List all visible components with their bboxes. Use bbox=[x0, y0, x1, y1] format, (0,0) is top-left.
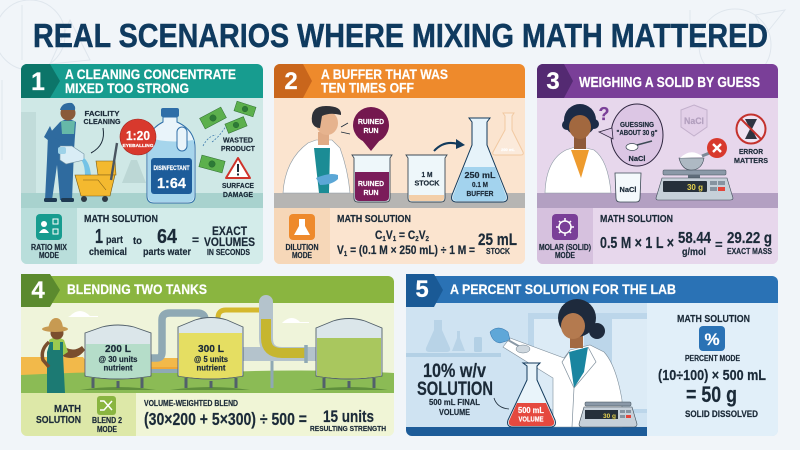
panel 2 number: 2 bbox=[284, 68, 298, 95]
ruined run bubble: RUN bbox=[364, 126, 378, 135]
disinfectant jug bbox=[147, 108, 195, 203]
faded flask bbox=[493, 113, 523, 155]
panel 1: cleaning concentrate: MIXED TOO STRONG bbox=[65, 81, 189, 96]
math solution 3: MATH SOLUTION bbox=[600, 213, 673, 225]
math solution 2: V bbox=[337, 245, 345, 257]
percent icon: % bbox=[704, 330, 720, 349]
faded broom bbox=[122, 160, 146, 183]
panel 2: buffer bbox=[274, 64, 525, 264]
callout line bbox=[494, 398, 509, 409]
error matters label: ERROR bbox=[739, 147, 764, 156]
farmer bbox=[42, 318, 85, 393]
tank 1 bbox=[85, 325, 151, 388]
math solution 5: SOLID DISSOLVED bbox=[685, 409, 758, 420]
panel 5 heading: A PERCENT SOLUTION FOR THE LAB bbox=[450, 282, 676, 297]
red flask: VOLUME bbox=[518, 416, 544, 424]
math solution 1: 64 bbox=[157, 226, 178, 248]
math solution 2: 2 bbox=[426, 236, 429, 243]
panel 2 heading: A BUFFER THAT WAS bbox=[321, 67, 448, 82]
math solution 1 bbox=[84, 213, 255, 258]
guessing bubble: "ABOUT 30 g" bbox=[616, 130, 658, 137]
buffer flask: BUFFER bbox=[466, 189, 494, 198]
tank 2: 300 L bbox=[198, 343, 225, 355]
facility cleaning label: FACILITY bbox=[84, 109, 120, 118]
math solution 1: part bbox=[106, 234, 123, 246]
blend formula: 15 units bbox=[323, 407, 374, 426]
worker pouring bbox=[44, 103, 91, 202]
percent solution text: 500 mL FINAL bbox=[429, 398, 480, 407]
math solution 2: 25 mL bbox=[478, 230, 517, 249]
red x badge bbox=[707, 138, 727, 158]
panel 2: buffer: TEN TIMES OFF bbox=[321, 80, 414, 96]
panel 3 heading: WEIGHING A SOLID BY GUESS bbox=[579, 74, 760, 91]
scale: 30 g bbox=[687, 183, 703, 192]
math solution 2: 1 bbox=[382, 236, 386, 243]
blend mode label: BLEND 2 bbox=[92, 416, 123, 425]
math solution 3: 58.44 bbox=[678, 230, 711, 247]
ratio mix mode label bbox=[31, 243, 68, 260]
panel 5 tab bbox=[406, 274, 443, 307]
math solution 2: V bbox=[386, 230, 393, 242]
red 1:20 badge bbox=[120, 119, 156, 155]
math solution 3: 29.22 g bbox=[727, 230, 772, 247]
panel 1 heading: A CLEANING CONCENTRATE bbox=[65, 67, 236, 82]
wasted product label: PRODUCT bbox=[221, 144, 255, 153]
ruined beaker: RUINED bbox=[358, 179, 385, 188]
panel 3: weighing a solid bbox=[537, 64, 778, 264]
tank 3 bbox=[316, 318, 382, 388]
math solution 1: MATH SOLUTION bbox=[84, 213, 158, 225]
math solution 2: = C bbox=[396, 230, 415, 242]
red flask: 500 mL bbox=[518, 406, 544, 415]
panel 4 heading: BLENDING TWO TANKS bbox=[67, 282, 207, 297]
warning triangle bbox=[226, 158, 250, 178]
percent solution text: 10% w/v bbox=[423, 361, 486, 382]
blend mode label bbox=[92, 416, 123, 434]
faded NaCl hexagon bbox=[681, 105, 707, 136]
faded flask: 200 mL bbox=[501, 147, 515, 152]
molar icon bbox=[552, 214, 578, 240]
disinfectant jug: 1:64 bbox=[157, 175, 187, 192]
dilution mode label: MODE bbox=[292, 251, 312, 260]
math solution 2: STOCK bbox=[486, 247, 510, 256]
math solution 1: to bbox=[133, 236, 142, 247]
blend mode label: MODE bbox=[97, 425, 117, 434]
panel 4 number: 4 bbox=[31, 277, 45, 304]
math solution 2 bbox=[337, 213, 517, 258]
ratio mix icon bbox=[36, 214, 62, 240]
error matters label bbox=[734, 147, 768, 165]
math solution 1: IN SECONDS bbox=[207, 248, 251, 257]
percent solution text: VOLUME bbox=[439, 408, 471, 417]
blend formula: VOLUME-WEIGHTED BLEND bbox=[144, 399, 238, 408]
guessing bubble: NaCl bbox=[628, 156, 646, 163]
arrow to flask bbox=[434, 139, 465, 151]
panel 1 number: 1 bbox=[31, 68, 45, 96]
blend formula bbox=[144, 399, 386, 433]
ruined run bubble: RUINED bbox=[358, 117, 385, 126]
math solution 1: chemical bbox=[89, 246, 127, 258]
red 1:20 badge: 1:20 bbox=[126, 128, 150, 143]
math solution 1: = bbox=[192, 233, 199, 247]
panel 4: blending tanks bbox=[21, 274, 394, 436]
question mark: ? bbox=[598, 104, 610, 124]
math solution 2: C bbox=[375, 230, 383, 242]
tank 1: @ 30 units bbox=[98, 355, 138, 364]
worried scientist bbox=[545, 104, 611, 193]
blend formula: RESULTING STRENGTH bbox=[310, 424, 386, 433]
molar mode label: MODE bbox=[555, 251, 575, 260]
ruined run bubble bbox=[353, 107, 389, 151]
stock beaker: STOCK bbox=[414, 178, 440, 188]
tank 2 bbox=[178, 318, 243, 388]
facility cleaning label: CLEANING bbox=[84, 117, 121, 126]
math solution label bbox=[36, 403, 81, 426]
percent solution text: SOLUTION bbox=[417, 379, 493, 400]
dilution mode label bbox=[286, 243, 319, 260]
dashed cycle arrows bbox=[203, 126, 226, 146]
blend formula: (30×200 + 5×300) ÷ 500 = bbox=[144, 409, 307, 429]
math solution 5: MATH SOLUTION bbox=[677, 313, 750, 325]
red flask bbox=[508, 363, 555, 427]
math solution 1: VOLUMES bbox=[204, 235, 255, 249]
tank 2: nutrient bbox=[196, 364, 226, 372]
disinfectant jug: DISINFECTANT bbox=[154, 165, 190, 172]
mop bucket bbox=[75, 143, 117, 202]
lab scientist bbox=[490, 299, 622, 427]
math solution 2: = (0.1 M × 250 mL) ÷ 1 M = bbox=[347, 245, 475, 257]
math solution 2: V bbox=[419, 230, 426, 242]
math solution 3: g/mol bbox=[682, 246, 706, 258]
scale bbox=[656, 170, 733, 200]
scoop bbox=[508, 340, 530, 353]
dilution icon bbox=[289, 214, 315, 240]
stock beaker bbox=[406, 155, 447, 202]
small scale: 30 g bbox=[603, 413, 616, 420]
math solution 2: 2 bbox=[415, 236, 419, 243]
math solution 5: = 50 g bbox=[686, 382, 737, 407]
panel 5 number: 5 bbox=[415, 276, 429, 303]
math solution 3 bbox=[600, 213, 773, 258]
arrow to bucket bbox=[91, 128, 104, 153]
surface damage label: DAMAGE bbox=[223, 190, 253, 199]
math solution 1: 1 bbox=[95, 226, 103, 248]
math solution 3: = bbox=[715, 237, 723, 252]
guessing bubble bbox=[599, 104, 663, 166]
molar mode label: MOLAR (SOLID) bbox=[539, 243, 591, 252]
math solution 5: (10÷100) × 500 mL bbox=[658, 368, 766, 384]
angry scientist bbox=[283, 106, 350, 193]
NaCl beaker: NaCl bbox=[620, 185, 636, 194]
math solution 1: EXACT bbox=[212, 224, 248, 238]
no hourglass icon bbox=[736, 114, 766, 144]
dilution mode label: DILUTION bbox=[286, 243, 319, 252]
buffer flask bbox=[452, 118, 507, 202]
stock beaker: 1 M bbox=[422, 170, 432, 179]
faded NaCl hexagon: NaCl bbox=[684, 116, 704, 126]
math solution 3: EXACT MASS bbox=[727, 247, 773, 256]
facility cleaning label bbox=[84, 109, 121, 126]
tank 1: 200 L bbox=[105, 343, 132, 355]
NaCl beaker bbox=[615, 173, 641, 202]
math solution label: SOLUTION bbox=[36, 414, 81, 426]
panel 1: cleaning concentrate bbox=[21, 64, 263, 264]
surface damage label: SURFACE bbox=[222, 181, 254, 190]
blend icon bbox=[97, 396, 116, 415]
small scale bbox=[579, 402, 637, 427]
ruined beaker bbox=[352, 155, 392, 202]
panel 3 number: 3 bbox=[546, 68, 560, 95]
panel 4 tab bbox=[21, 274, 60, 307]
money bills icon bbox=[199, 101, 256, 173]
math solution 2: 1 bbox=[344, 251, 347, 258]
math solution 1: parts water bbox=[143, 246, 191, 258]
math solution label: MATH bbox=[54, 403, 81, 415]
ratio mix mode label: MODE bbox=[39, 251, 59, 260]
surface damage label bbox=[222, 181, 254, 199]
buffer flask: 250 mL bbox=[464, 171, 496, 180]
error matters label: MATTERS bbox=[734, 156, 768, 165]
wasted product label bbox=[221, 136, 255, 153]
guessing bubble: GUESSING bbox=[620, 122, 655, 129]
math solution 5 bbox=[658, 313, 766, 420]
buffer flask: 0.1 M bbox=[472, 180, 488, 189]
math solution 2: MATH SOLUTION bbox=[337, 213, 411, 225]
math solution 5: PERCENT MODE bbox=[685, 354, 741, 363]
molar mode label bbox=[539, 243, 591, 260]
scoop with powder bbox=[679, 152, 712, 170]
percent solution text bbox=[417, 361, 493, 417]
math solution 2: 1 bbox=[393, 236, 396, 243]
tank 2: @ 5 units bbox=[194, 355, 229, 364]
ruined beaker: RUN bbox=[364, 188, 378, 197]
wasted product label: WASTED bbox=[223, 136, 254, 144]
math solution 3: 0.5 M × 1 L × bbox=[600, 235, 674, 252]
red 1:20 badge: EYEBALLING bbox=[122, 143, 154, 149]
tank 1: nutrient bbox=[104, 364, 133, 372]
ratio mix mode label: RATIO MIX bbox=[31, 243, 68, 252]
pipes bbox=[150, 302, 316, 388]
clouds bbox=[68, 311, 309, 323]
panel 5: percent solution bbox=[406, 274, 778, 436]
